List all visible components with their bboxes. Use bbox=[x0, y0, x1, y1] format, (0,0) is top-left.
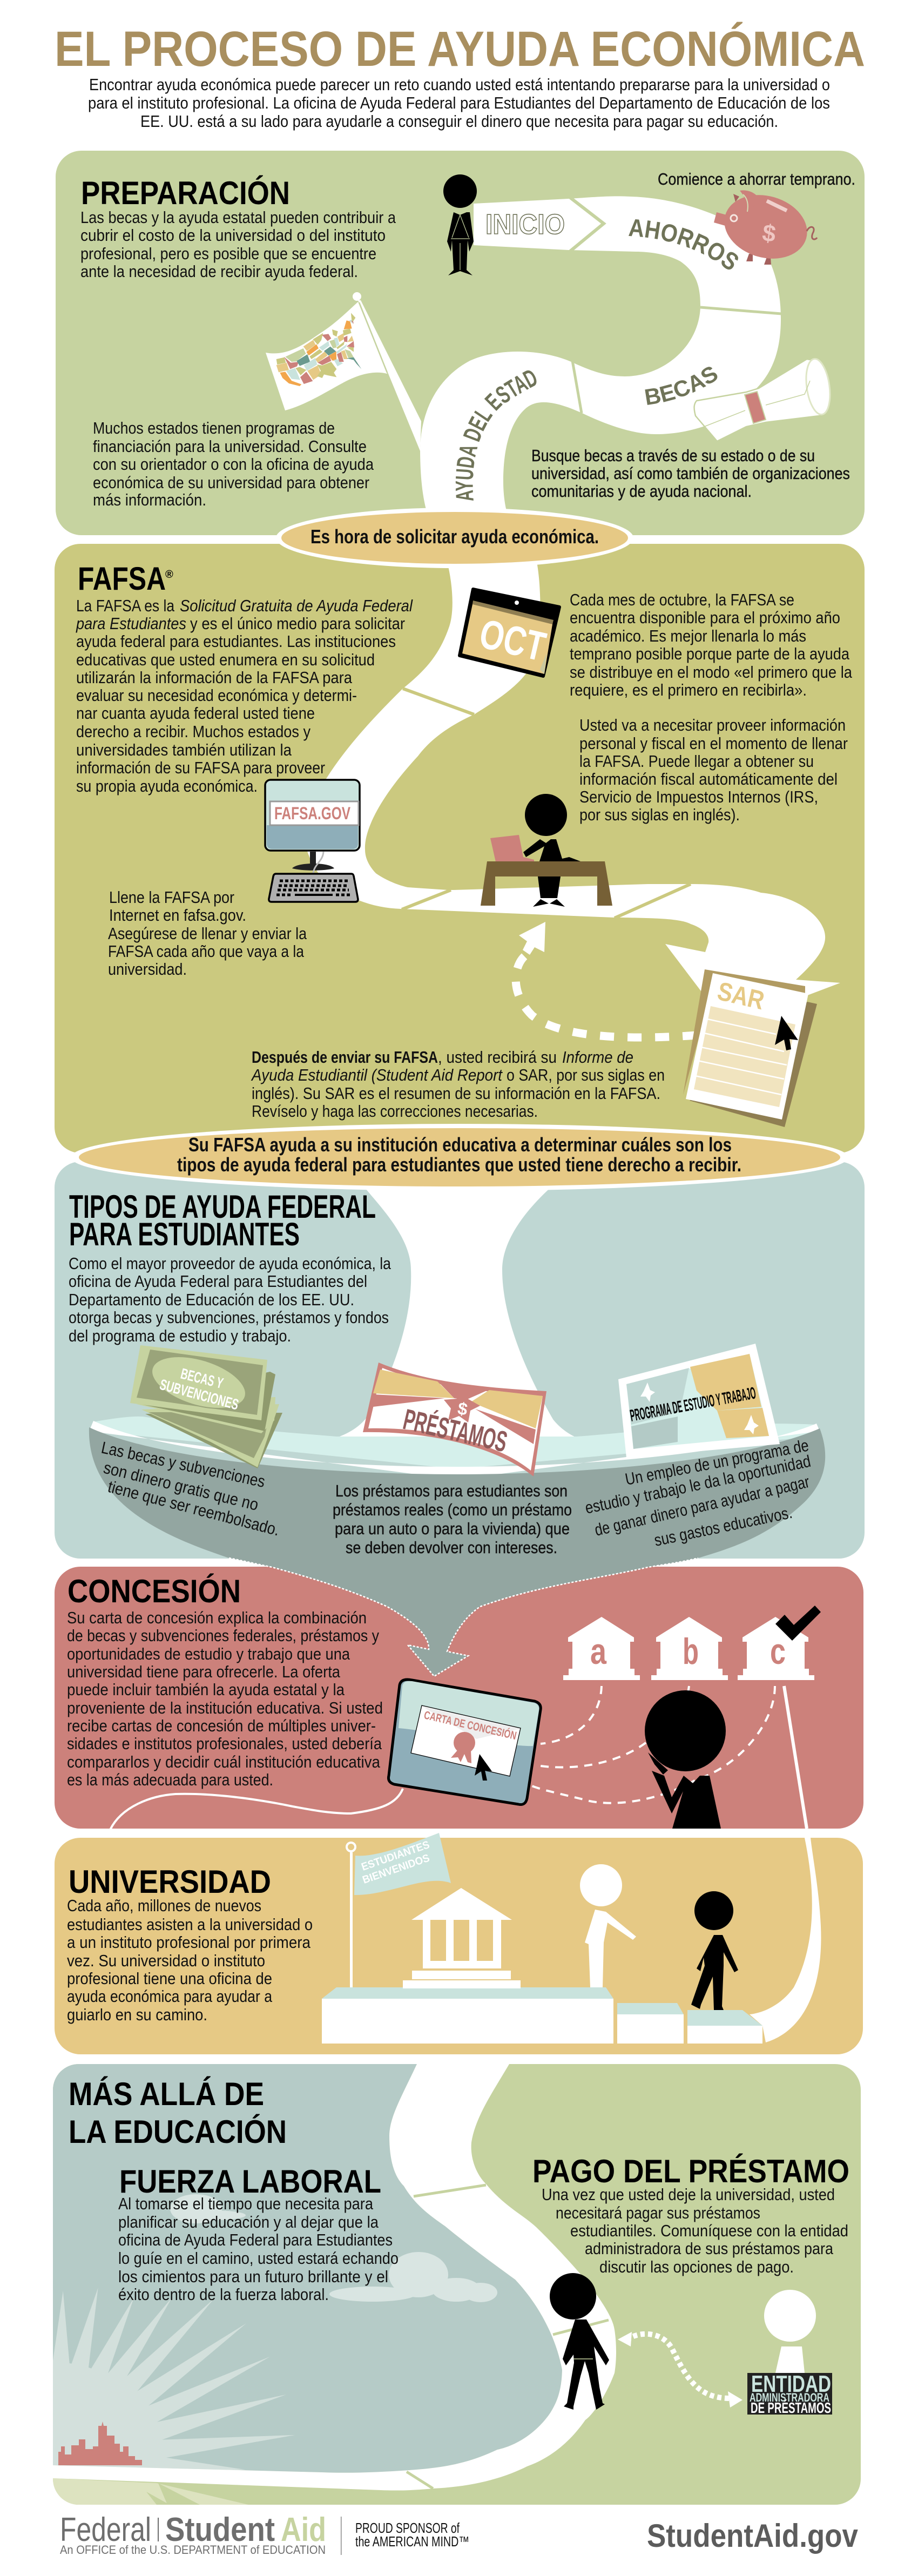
text: sar bbox=[251, 1048, 665, 1121]
icon: flag with US map bbox=[266, 292, 421, 451]
text: estudio y trabajo bbox=[583, 1435, 812, 1550]
text: fafsa intro: educativas que usted enumera en su solicitud bbox=[76, 650, 375, 669]
text: llene: universidad. bbox=[108, 960, 187, 979]
text: concesión: universidad tiene para ofrecerle. La oferta bbox=[67, 1662, 341, 1681]
text: pago del préstamo: estudiantiles. Comuníquese con la entidad bbox=[570, 2221, 848, 2240]
road: preparación bbox=[420, 196, 781, 513]
text: fafsa intro: La FAFSA es la bbox=[76, 596, 175, 615]
text: tipos de ayuda: del programa de estudio y trabajo. bbox=[69, 1326, 291, 1345]
text: tax information: Usted va a necesitar proveer información bbox=[579, 716, 846, 734]
text: universidad: Cada año, millones de nuevos bbox=[67, 1896, 261, 1915]
footer sponsor line: the AMERICAN MIND™ bbox=[355, 2533, 469, 2550]
text: universidad: guiarlo en su camino. bbox=[67, 2005, 207, 2024]
heading: universidad: UNIVERSIDAD bbox=[69, 1864, 271, 1900]
text: becas y subvenciones: tiene que ser reembolsado. bbox=[106, 1477, 282, 1540]
text: estados: financiación para la universidad. Consulte bbox=[93, 437, 367, 456]
ellipse banner: tipos de ayuda bbox=[71, 1124, 848, 1191]
text: fafsa intro: evaluar su necesidad económica y determi- bbox=[76, 686, 357, 705]
panel: fafsa bbox=[55, 544, 865, 1153]
icon: welcome flag bbox=[347, 1833, 451, 1988]
heading: fafsa: ® bbox=[165, 569, 173, 581]
icon: houses a b c bbox=[563, 1606, 821, 1680]
text: concesión: puede incluir también la ayuda estatal y la bbox=[67, 1680, 345, 1699]
text: tax information bbox=[579, 716, 848, 824]
text: universidad bbox=[67, 1896, 313, 2024]
text: estudio y trabajo: Un empleo de un programa de bbox=[624, 1435, 810, 1489]
icon: welcome flag: ESTUDIANTES bbox=[360, 1839, 431, 1873]
panel: más allá de la educación bbox=[53, 2064, 861, 2505]
text: fuerza laboral: lo guíe en el camino, usted estará echando bbox=[118, 2249, 399, 2268]
intro text bbox=[88, 75, 830, 131]
icon: houses a b c: c bbox=[770, 1631, 786, 1672]
text: fuerza laboral bbox=[118, 2194, 399, 2304]
text: october: Cada mes de octubre, la FAFSA se bbox=[570, 590, 794, 609]
text: sar: Después de enviar su FAFSA bbox=[252, 1048, 438, 1067]
footer logo: federal student aid: Federal bbox=[60, 2511, 151, 2548]
text: estados: Muchos estados tienen programas de bbox=[93, 419, 335, 437]
icon: person at desk bbox=[481, 794, 612, 907]
text: preparación bbox=[80, 208, 396, 281]
text: estudio y trabajo: estudio y trabajo le da la oportunidad bbox=[583, 1452, 812, 1518]
icon: welcome flag: BIENVENIDOS bbox=[361, 1852, 431, 1886]
text: tipos de ayuda: oficina de Ayuda Federal para Estudiantes del bbox=[69, 1272, 367, 1291]
arrow: dashed return bbox=[516, 922, 697, 1037]
intro text: Encontrar ayuda económica puede parecer un reto cuando usted está intentando prepararse para la universidad o bbox=[89, 75, 830, 94]
text: estudio y trabajo: de ganar dinero para ayudar a pagar bbox=[593, 1472, 811, 1540]
text: fuerza laboral: oficina de Ayuda Federal para Estudiantes bbox=[118, 2230, 393, 2249]
road label: ahorros: AHORROS bbox=[629, 219, 738, 270]
bowl and funnel arrow bbox=[89, 1421, 825, 1676]
icon: houses a b c: a bbox=[590, 1631, 607, 1672]
text: pago del préstamo: necesitará pagar sus préstamos bbox=[556, 2203, 760, 2222]
text: pago del préstamo: discutir las opciones de pago. bbox=[599, 2257, 794, 2276]
text: becas: Busque becas a través de su estado o de su bbox=[531, 446, 815, 465]
text: estados: con su orientador o con la oficina de ayuda bbox=[93, 455, 374, 474]
text: universidad: vez. Su universidad o instituto bbox=[67, 1951, 265, 1970]
icon: piggy bank: $ bbox=[761, 219, 778, 247]
text: pago del préstamo: administradora de sus préstamos para bbox=[585, 2239, 834, 2258]
road: tipos de ayuda bbox=[336, 1185, 577, 1438]
text: préstamos: se deben devolver con intereses. bbox=[346, 1538, 557, 1557]
text: sar: o SAR, por sus siglas en bbox=[507, 1066, 665, 1084]
text: tax information: personal y fiscal en el momento de llenar bbox=[579, 734, 848, 753]
panel: universidad bbox=[55, 1833, 863, 2054]
text: becas bbox=[531, 446, 850, 501]
footer url: StudentAid.gov bbox=[647, 2518, 859, 2554]
footer logo: federal student aid bbox=[60, 2511, 326, 2557]
icon: white guide figure bbox=[580, 1864, 636, 1987]
icon: money stack: SUBVENCIONES bbox=[158, 1376, 240, 1413]
text: fafsa intro: nar cuanta ayuda federal usted tiene bbox=[76, 704, 315, 723]
text: sar: Informe de bbox=[562, 1048, 633, 1067]
text: becas y subvenciones bbox=[100, 1438, 282, 1540]
footer logo: federal student aid: Aid bbox=[281, 2511, 326, 2548]
road label: inicio: INICIO bbox=[485, 209, 565, 240]
text: fafsa intro: universidades también utilizan la bbox=[76, 740, 292, 759]
text: llene: Internet en fafsa.gov. bbox=[109, 906, 246, 925]
text: fuerza laboral: los cimientos para un futuro brillante y el bbox=[118, 2267, 388, 2286]
icon: stick figure at start bbox=[443, 174, 477, 275]
text: concesión: recibe cartas de concesión de múltiples univer- bbox=[67, 1716, 376, 1735]
sunburst bbox=[53, 2288, 294, 2470]
icon: loan card: PRÉSTAMOS bbox=[400, 1403, 510, 1459]
text: fafsa intro: ayuda federal para estudiantes. Las instituciones bbox=[76, 632, 396, 651]
heading: tipos de ayuda bbox=[69, 1189, 376, 1252]
text: préstamos bbox=[333, 1481, 572, 1557]
text: fuerza laboral: éxito dentro de la fuerza laboral. bbox=[118, 2285, 329, 2304]
text: october: académico. Es mejor llenarla lo más bbox=[570, 626, 806, 645]
icon: scroll bbox=[694, 358, 833, 441]
heading: concesión: CONCESIÓN bbox=[68, 1573, 241, 1609]
text: tipos de ayuda: Como el mayor proveedor de ayuda económica, la bbox=[69, 1254, 392, 1273]
icon: walking student bbox=[691, 1891, 738, 2010]
bowl plate bbox=[93, 1417, 816, 1469]
text: preparación: ante la necesidad de recibir ayuda federal. bbox=[80, 262, 358, 281]
heading: preparación: PREPARACIÓN bbox=[81, 175, 290, 211]
icon: tablet with award letter bbox=[388, 1680, 541, 1805]
footer logo: federal student aid: An OFFICE of the U.S. DEPARTMENT of EDUCATION bbox=[60, 2543, 326, 2557]
footer sponsor line: PROUD SPONSOR of bbox=[355, 2520, 460, 2536]
heading: más allá de la educación: MÁS ALLÁ DE bbox=[69, 2076, 264, 2112]
text: universidad: ayuda económica para ayudar a bbox=[67, 1987, 273, 2006]
thin road line bbox=[110, 1789, 403, 1830]
text: ahorrar: Comience a ahorrar temprano. bbox=[658, 170, 855, 188]
text: préstamos: para un auto o para la vivienda) que bbox=[335, 1519, 570, 1538]
intro text: para el instituto profesional. La oficina de Ayuda Federal para Estudiantes del Departamento de Educación de los bbox=[88, 93, 830, 112]
text: préstamos: préstamos reales (como un préstamo bbox=[333, 1500, 572, 1519]
text: llene: Asegúrese de llenar y enviar la bbox=[108, 924, 307, 943]
footer sponsor line bbox=[341, 2517, 469, 2555]
road label: becas: BECAS bbox=[645, 367, 717, 405]
icon: loan servicer figure and sign: ENTIDAD bbox=[751, 2371, 831, 2397]
text: becas: comunitarias y de ayuda nacional. bbox=[531, 482, 752, 501]
heading: más allá de la educación: LA EDUCACIÓN bbox=[69, 2114, 287, 2150]
icon: money stack: BECAS Y bbox=[179, 1365, 225, 1392]
text: october bbox=[570, 590, 853, 699]
dashed options bbox=[532, 1686, 775, 1803]
text: estados: económica de su universidad para obtener bbox=[93, 473, 369, 492]
text: becas: universidad, así como también de organizaciones bbox=[531, 464, 850, 483]
text: fafsa intro: para Estudiantes bbox=[76, 614, 186, 633]
heading: más allá de la educación bbox=[69, 2076, 287, 2150]
icon: piggy bank bbox=[714, 186, 817, 268]
lower sun glow bbox=[53, 2478, 248, 2505]
icon: loan servicer figure and sign bbox=[747, 2290, 832, 2416]
text: sar: Revíselo y haga las correcciones necesarias. bbox=[252, 1102, 538, 1121]
text: fafsa intro: información de su FAFSA para proveer bbox=[76, 758, 325, 777]
icon: student aid report bbox=[683, 969, 817, 1127]
text: universidad: estudiantes asisten a la universidad o bbox=[67, 1915, 313, 1934]
text: préstamos: Los préstamos para estudiantes son bbox=[335, 1481, 568, 1500]
text: preparación: cubrir el costo de la universidad o del instituto bbox=[80, 226, 386, 245]
icon: thinking person bbox=[645, 1690, 726, 1829]
text: tax information: Servicio de Impuestos Internos (IRS, bbox=[579, 787, 818, 806]
text: concesión: proveniente de la institución educativa. Si usted bbox=[67, 1698, 383, 1717]
icon: work-study card bbox=[618, 1344, 780, 1458]
icon: walking graduate bbox=[550, 2273, 609, 2410]
text: fafsa intro: y es el único medio para solicitar bbox=[190, 614, 405, 633]
icon: clouds bbox=[170, 2194, 497, 2302]
text: estudio y trabajo: sus gastos educativos. bbox=[652, 1503, 794, 1550]
text: tipos de ayuda bbox=[69, 1254, 392, 1345]
text: becas y subvenciones: Las becas y subvenciones bbox=[100, 1438, 267, 1491]
heading: fafsa: FAFSA bbox=[78, 561, 166, 597]
text: fuerza laboral: planificar su educación y al dejar que la bbox=[118, 2213, 379, 2231]
icon: loan servicer figure and sign: ADMINISTRADORA bbox=[750, 2391, 829, 2404]
icon: october calendar bbox=[460, 589, 559, 676]
icon: university building bbox=[322, 1888, 613, 2044]
icon: student aid report: SAR bbox=[715, 977, 767, 1015]
ellipse banner: tipos de ayuda: Su FAFSA ayuda a su institución educativa a determinar cuáles son los bbox=[188, 1134, 732, 1156]
text: preparación: Las becas y la ayuda estatal pueden contribuir a bbox=[80, 208, 396, 227]
text: fafsa intro: su propia ayuda económica. bbox=[76, 777, 258, 795]
text: universidad: profesional tiene una oficina de bbox=[67, 1969, 272, 1988]
text: llene bbox=[108, 888, 307, 979]
panel: concesión bbox=[55, 1567, 863, 1830]
text: concesión: de becas y subvenciones federales, préstamos y bbox=[67, 1626, 379, 1645]
text: october: encuentra disponible para el próximo año bbox=[570, 608, 840, 627]
text: concesión: oportunidades de estudio y trabajo que una bbox=[67, 1644, 350, 1663]
road: final bbox=[53, 2064, 616, 2491]
text: fuerza laboral: Al tomarse el tiempo que necesita para bbox=[118, 2194, 374, 2213]
text: tax information: por sus siglas en inglés). bbox=[579, 805, 740, 824]
ellipse banner: solicitar ayuda: Es hora de solicitar ayuda económica. bbox=[310, 525, 599, 548]
arrow: dotted two-way bbox=[618, 2332, 742, 2408]
heading: tipos de ayuda: TIPOS DE AYUDA FEDERAL bbox=[69, 1189, 376, 1225]
text: concesión: Su carta de concesión explica la combinación bbox=[67, 1608, 367, 1627]
panel: preparación bbox=[56, 151, 865, 535]
icon: money stack bbox=[130, 1345, 282, 1468]
text: pago del préstamo: Una vez que usted deje la universidad, usted bbox=[542, 2185, 835, 2204]
icon: october calendar: OCT bbox=[475, 611, 550, 670]
icon: houses a b c: b bbox=[683, 1631, 699, 1672]
text: tipos de ayuda: Departamento de Educación de los EE. UU. bbox=[69, 1290, 354, 1309]
solid road line bbox=[784, 1686, 807, 1829]
text: concesión bbox=[67, 1608, 383, 1789]
ellipse banner: tipos de ayuda: tipos de ayuda federal para estudiantes que usted tiene derecho a recibir. bbox=[177, 1154, 741, 1176]
text: becas y subvenciones: son dinero gratis que no bbox=[102, 1458, 260, 1514]
text: llene: FAFSA cada año que vaya a la bbox=[108, 942, 305, 961]
icon: city skyline bbox=[58, 2422, 142, 2465]
icon: loan card bbox=[363, 1363, 546, 1476]
text: fafsa intro bbox=[76, 596, 413, 795]
panel: tipos de ayuda bbox=[55, 1162, 865, 1559]
text: october: requiere, es el primero en recibirla». bbox=[570, 680, 807, 699]
icon: tablet with award letter: CARTA DE CONCESIÓN bbox=[423, 1708, 518, 1742]
text: october: temprano posible porque parte de la ayuda bbox=[570, 644, 850, 663]
heading: tipos de ayuda: PARA ESTUDIANTES bbox=[69, 1216, 300, 1252]
text: pago del préstamo bbox=[542, 2185, 848, 2276]
road: fafsa bbox=[302, 562, 840, 996]
text: concesión: compararlos y decidir cuál institución educativa bbox=[67, 1752, 381, 1771]
text: sar: inglés). Su SAR es el resumen de su información en la FAFSA. bbox=[252, 1084, 660, 1103]
text: universidad: a un instituto profesional por primera bbox=[67, 1933, 311, 1952]
intro text: EE. UU. está a su lado para ayudarle a conseguir el dinero que necesita para pagar su educación. bbox=[140, 112, 778, 131]
footer logo: federal student aid: Student bbox=[165, 2511, 275, 2548]
text: estados bbox=[93, 419, 374, 509]
heading: pago del préstamo: PAGO DEL PRÉSTAMO bbox=[532, 2153, 849, 2189]
icon: computer monitor and keyboard bbox=[265, 780, 360, 902]
road: universidad bbox=[750, 1838, 821, 2042]
text: october: se distribuye en el modo «el primero que la bbox=[570, 663, 853, 682]
text: fafsa intro: utilizarán la información de la FAFSA para bbox=[76, 668, 353, 687]
heading: fuerza laboral: FUERZA LABORAL bbox=[119, 2163, 381, 2200]
text: concesión: sidades e institutos profesionales, usted debería bbox=[67, 1734, 382, 1753]
text: tax information: información fiscal automáticamente del bbox=[579, 770, 838, 788]
text: sar: , usted recibirá su bbox=[438, 1048, 557, 1067]
icon: loan card: $ bbox=[456, 1398, 469, 1419]
icon: computer monitor and keyboard: FAFSA.GOV bbox=[274, 804, 351, 823]
text: concesión: es la más adecuada para usted. bbox=[67, 1770, 273, 1789]
ellipse banner: solicitar ayuda bbox=[276, 508, 633, 568]
text: tipos de ayuda: otorga becas y subvenciones, préstamos y fondos bbox=[69, 1308, 389, 1327]
icon: steps bbox=[617, 2003, 762, 2044]
text: llene: Llene la FAFSA por bbox=[109, 888, 234, 907]
text: fafsa intro: derecho a recibir. Muchos estados y bbox=[76, 722, 310, 741]
icon: loan servicer figure and sign: DE PRÉSTAMOS bbox=[751, 2399, 831, 2416]
text: estados: más información. bbox=[93, 490, 206, 509]
text: fafsa intro: Solicitud Gratuita de Ayuda Federal bbox=[180, 596, 413, 615]
text: preparación: profesional, pero es posible que se encuentre bbox=[80, 244, 376, 263]
text: tax information: la FAFSA. Puede llegar a obtener su bbox=[579, 752, 814, 771]
text: sar: Ayuda Estudiantil (Student Aid Report bbox=[251, 1066, 503, 1084]
